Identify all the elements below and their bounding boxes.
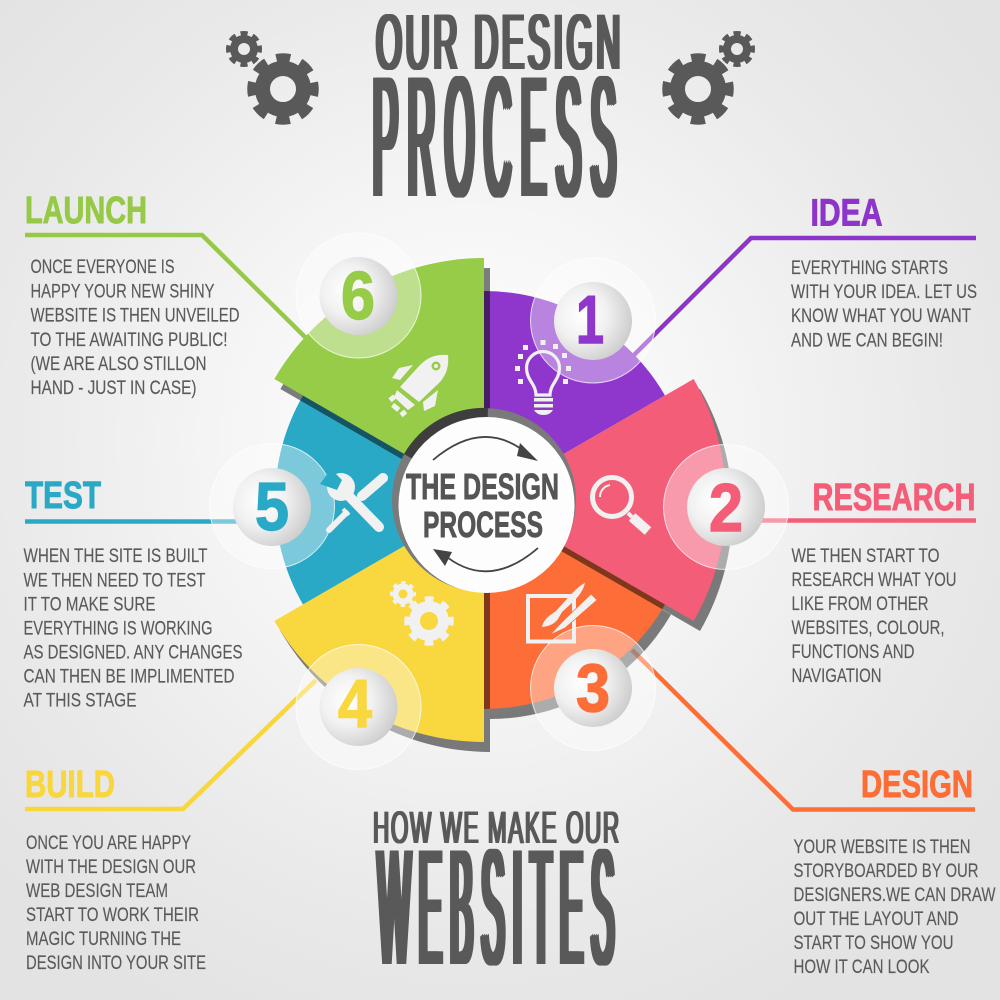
number badge 4: 4 (338, 666, 372, 742)
heading: test: TEST (25, 475, 101, 517)
arrows: cycle (433, 437, 538, 571)
number badge 2 (687, 468, 765, 546)
text: launch body: WEBSITE IS THEN UNVEILED (30, 306, 240, 326)
segment: build (274, 500, 484, 742)
text: build body: DESIGN INTO YOUR SITE (26, 953, 206, 974)
centre title: PROCESS (423, 504, 543, 545)
heading: build: BUILD (25, 764, 115, 806)
number badge 3: 3 (576, 650, 610, 726)
segment: test (275, 396, 484, 604)
text: test body: WHEN THE SITE IS BUILT (24, 546, 208, 567)
number badge 6 (320, 257, 398, 335)
text: launch body: HAPPY YOUR NEW SHINY (30, 282, 215, 302)
segment: research (484, 379, 726, 621)
panel: launch (25, 190, 240, 399)
icon: brush and pencil (528, 583, 597, 642)
bottom title: how we make our websites: HOW WE MAKE OUR (372, 802, 620, 853)
panel: design (794, 764, 996, 978)
number badge 5 (233, 468, 311, 546)
text: build body: ONCE YOU ARE HAPPY (26, 833, 191, 854)
text: design body: OUT THE LAYOUT AND (794, 909, 958, 930)
panel: test (24, 475, 242, 712)
segment: idea (484, 291, 665, 500)
text: test body: EVERYTHING IS WORKING (24, 618, 212, 640)
text: test body: AS DESIGNED. ANY CHANGES (24, 642, 242, 664)
segment: launch (274, 258, 484, 500)
text: design body (794, 837, 996, 978)
icon: gears left (228, 34, 314, 120)
text: research body: FUNCTIONS AND (792, 642, 914, 663)
text: idea body: AND WE CAN BEGIN! (791, 330, 943, 352)
text: design body: START TO SHOW YOU (794, 933, 954, 954)
chart: design process wheel (274, 258, 732, 752)
centre title (406, 466, 559, 545)
text: build body: WEB DESIGN TEAM (26, 881, 168, 902)
text: build body: MAGIC TURNING THE (26, 929, 181, 950)
text: launch body: HAND - JUST IN CASE) (30, 378, 196, 399)
number badge 3 (554, 649, 632, 727)
text: research body: LIKE FROM OTHER (792, 594, 928, 615)
panel: idea (791, 192, 977, 352)
number badge 2: 2 (709, 470, 743, 546)
heading: launch: LAUNCH (25, 190, 147, 232)
panel: build (25, 764, 206, 974)
text: launch body: TO THE AWAITING PUBLIC! (30, 330, 228, 351)
number badge 6: 6 (341, 258, 375, 334)
text: test body: WE THEN NEED TO TEST (24, 570, 206, 592)
number badge 1 (554, 282, 632, 360)
text: build body: START TO WORK THEIR (26, 905, 199, 926)
panel: research (792, 477, 976, 687)
text: research body (792, 546, 956, 687)
text: research body: WEBSITES, COLOUR, (792, 618, 944, 639)
icon: rocket (388, 355, 448, 417)
icon: gears (392, 583, 450, 642)
text: test body: CAN THEN BE IMPLIMENTED (24, 666, 234, 688)
text: research body: RESEARCH WHAT YOU (792, 570, 956, 591)
title: our design process: PROCESS (370, 41, 623, 233)
segment: design (484, 500, 665, 709)
heading: idea: IDEA (810, 192, 882, 234)
text: launch body: (WE ARE ALSO STILLON (30, 354, 206, 375)
icon: magnifying glass (592, 478, 648, 531)
number badge 5: 5 (255, 469, 289, 545)
number badge 1: 1 (576, 282, 604, 358)
text: test body (24, 546, 242, 712)
centre title: THE DESIGN (406, 466, 559, 507)
icon: gears right (666, 34, 752, 120)
text: launch body (30, 257, 240, 399)
centre circle (398, 417, 574, 593)
halos (210, 233, 788, 770)
text: research body: WE THEN START TO (792, 546, 940, 567)
icon: wrench and screwdriver (320, 469, 383, 530)
text: test body: AT THIS STAGE (24, 690, 136, 712)
text: design body: HOW IT CAN LOOK (794, 957, 930, 978)
text: build body: WITH THE DESIGN OUR (26, 857, 196, 878)
text: launch body: ONCE EVERYONE IS (30, 257, 174, 278)
bottom title: how we make our websites: WEBSITES (375, 815, 620, 999)
text: idea body (791, 258, 977, 352)
text: build body (26, 833, 206, 974)
text: test body: IT TO MAKE SURE (24, 594, 156, 616)
text: idea body: EVERYTHING STARTS (791, 258, 948, 279)
connector lines (25, 235, 976, 810)
text: research body: NAVIGATION (792, 666, 882, 687)
icon: light bulb (515, 340, 571, 415)
number badge 4 (320, 666, 398, 746)
